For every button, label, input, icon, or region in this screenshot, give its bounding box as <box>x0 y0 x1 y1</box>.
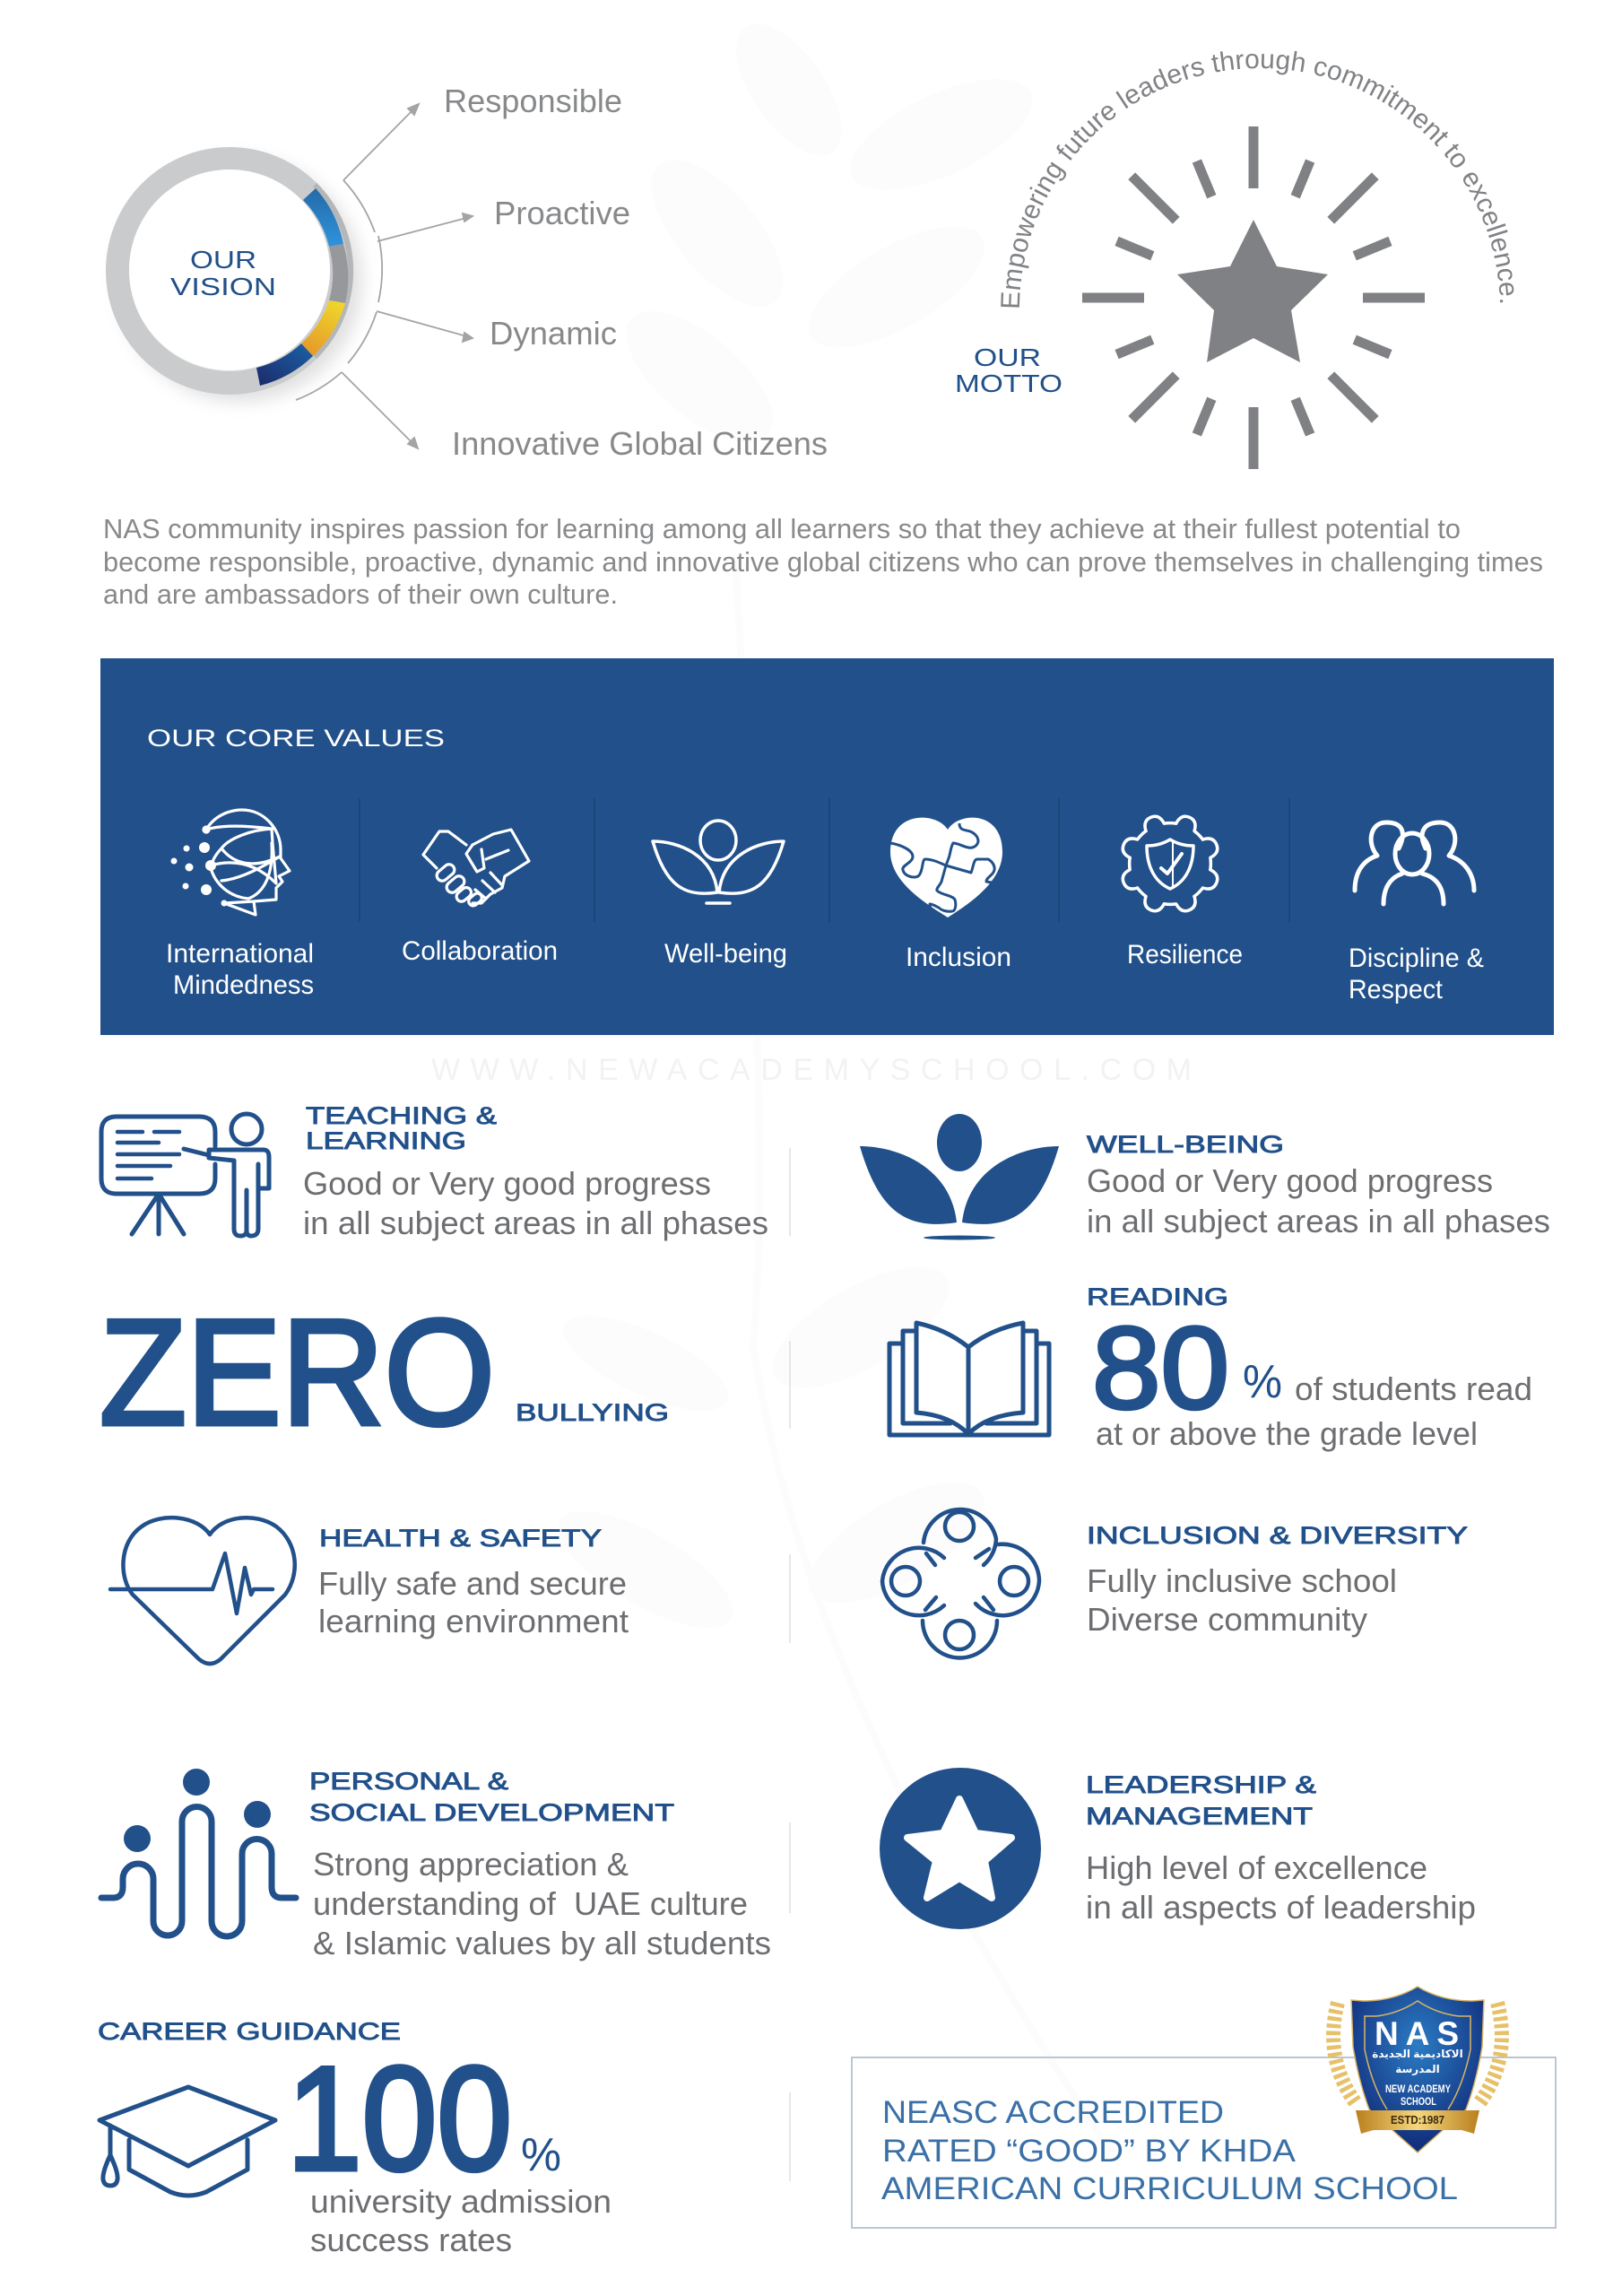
teaching text: in all subject areas in all phases <box>303 1205 768 1241</box>
teaching text <box>303 1165 768 1241</box>
accreditation text: NEASC ACCREDITED <box>882 2095 1224 2130</box>
well-being text: Good or Very good progress <box>1087 1162 1493 1199</box>
icon: three figures wave <box>101 1769 296 1936</box>
block: zero bullying <box>100 1288 669 1457</box>
health heading: HEALTH & SAFETY <box>319 1525 602 1552</box>
well-being text <box>1087 1162 1550 1239</box>
vision items: Proactive <box>494 195 630 231</box>
leadership heading: LEADERSHIP & <box>1086 1771 1316 1798</box>
leadership text <box>1086 1849 1476 1926</box>
leadership heading <box>1086 1771 1316 1830</box>
mission paragraph: and are ambassadors of their own culture. <box>103 578 618 610</box>
personal heading: PERSONAL & <box>309 1768 508 1795</box>
vision label: VISION <box>170 273 276 300</box>
motto label: MOTTO <box>955 370 1063 397</box>
core value labels <box>166 936 1484 1004</box>
mission paragraph: become responsible, proactive, dynamic and innovative global citizens who can prove themselves in challenging times <box>103 546 1543 578</box>
health text: Fully safe and secure <box>318 1565 627 1602</box>
accreditation text: RATED “GOOD” BY KHDA <box>882 2134 1297 2169</box>
inclusion text: Diverse community <box>1087 1601 1367 1638</box>
logo: NAS crest: SCHOOL <box>1401 2097 1436 2108</box>
vision diagram <box>117 83 828 462</box>
block: career guidance <box>98 2018 612 2258</box>
career text: success rates <box>310 2222 512 2258</box>
inclusion text: Fully inclusive school <box>1087 1562 1397 1599</box>
background watermark plant <box>542 6 1112 2152</box>
icon: teacher at board <box>101 1114 269 1236</box>
teaching heading: TEACHING & <box>306 1102 497 1129</box>
teaching heading: LEARNING <box>306 1127 466 1154</box>
core value labels: Discipline & <box>1349 944 1484 973</box>
vision items: Dynamic <box>490 315 617 352</box>
icon: star badge <box>880 1768 1041 1929</box>
icon: puzzle heart <box>890 818 1002 918</box>
icon: open book <box>889 1323 1049 1435</box>
well-being heading: WELL-BEING <box>1087 1131 1284 1158</box>
teaching text: Good or Very good progress <box>303 1165 711 1202</box>
leadership text: High level of excellence <box>1086 1849 1427 1886</box>
accreditation text: AMERICAN CURRICULUM SCHOOL <box>881 2171 1458 2206</box>
icon: solid lotus <box>860 1114 1059 1239</box>
leadership heading: MANAGEMENT <box>1086 1803 1313 1830</box>
reading percent: % <box>1243 1356 1282 1408</box>
icon: globe head <box>170 810 290 915</box>
vision label: OUR <box>190 246 256 274</box>
bullying label: BULLYING <box>516 1399 669 1426</box>
block: well-being <box>860 1114 1550 1239</box>
watermark url: WWW.NEWACADEMYSCHOOL.COM <box>431 1053 1192 1087</box>
leadership text: in all aspects of leadership <box>1086 1889 1476 1926</box>
inclusion heading: INCLUSION & DIVERSITY <box>1087 1522 1468 1549</box>
personal text: & Islamic values by all students <box>313 1925 771 1961</box>
core value labels: International <box>166 939 314 969</box>
motto label: OUR <box>974 344 1041 371</box>
icon: star with rays <box>1082 126 1425 469</box>
career heading: CAREER GUIDANCE <box>98 2018 401 2045</box>
block: personal and social development <box>101 1768 771 1961</box>
icon: four linked figures <box>882 1509 1039 1657</box>
motto label <box>955 344 1063 397</box>
career text <box>310 2183 612 2258</box>
logo: NAS crest <box>1333 1987 1502 2152</box>
health text <box>318 1565 629 1639</box>
reading figure: 80 <box>1092 1302 1229 1433</box>
reading text: at or above the grade level <box>1096 1415 1478 1452</box>
block: teaching and learning <box>101 1102 768 1241</box>
block: inclusion and diversity <box>882 1509 1468 1657</box>
health text: learning environment <box>318 1603 629 1639</box>
career figure: 100 <box>287 2036 512 2201</box>
reading text: of students read <box>1295 1370 1532 1407</box>
personal text: Strong appreciation & <box>313 1846 629 1883</box>
icon: heart with pulse <box>110 1518 295 1664</box>
icon: graduation cap <box>100 2087 275 2196</box>
accreditation text <box>881 2095 1458 2206</box>
logo: NAS crest: NEW ACADEMY <box>1385 2084 1451 2095</box>
teaching heading <box>306 1102 497 1154</box>
vision label <box>170 246 276 300</box>
vision connector arcs and arrows <box>296 104 473 448</box>
icon: gear with shield <box>1115 809 1225 918</box>
panel: core values <box>100 658 1554 1035</box>
logo: NAS crest: ESTD:1987 <box>1391 2113 1444 2126</box>
personal heading: SOCIAL DEVELOPMENT <box>309 1799 674 1826</box>
motto curved text: Empowering future leaders through commitment to excellence. <box>1001 50 1514 308</box>
personal heading <box>309 1768 674 1826</box>
career text: university admission <box>310 2183 612 2220</box>
mission paragraph <box>103 513 1543 610</box>
core value labels: Resilience <box>1127 940 1243 970</box>
inclusion text <box>1087 1562 1397 1638</box>
vision items <box>444 83 828 462</box>
logo: NAS crest: NAS <box>1375 2015 1459 2052</box>
core value labels: Well-being <box>664 939 787 969</box>
motto diagram <box>955 50 1514 469</box>
core value labels: Respect <box>1349 975 1444 1004</box>
zero number: ZERO <box>100 1288 495 1457</box>
vision ring <box>117 158 362 402</box>
icon: people group <box>1355 822 1474 904</box>
block: reading <box>889 1283 1532 1452</box>
core values heading: OUR CORE VALUES <box>147 725 445 752</box>
vision items: Innovative Global Citizens <box>452 425 828 462</box>
reading text <box>1096 1370 1532 1452</box>
block: health and safety <box>110 1518 629 1664</box>
block: leadership and management <box>880 1768 1476 1929</box>
personal text: understanding of UAE culture <box>313 1885 748 1922</box>
logo: NAS crest: المدرسة <box>1395 2063 1440 2075</box>
vision items: Responsible <box>444 83 622 119</box>
mission paragraph: NAS community inspires passion for learning among all learners so that they achieve at their fullest potential to <box>103 513 1461 544</box>
panel: accreditation box <box>852 1987 1556 2228</box>
icon: lotus outline <box>653 821 784 903</box>
icon: handshake <box>423 830 529 908</box>
well-being text: in all subject areas in all phases <box>1087 1203 1550 1239</box>
personal text <box>313 1846 771 1961</box>
career percent: % <box>521 2129 561 2181</box>
core value labels: Collaboration <box>402 936 558 966</box>
core value labels: Inclusion <box>906 943 1011 972</box>
core value labels: Mindedness <box>173 970 314 1000</box>
logo: NAS crest: الاكاديمية الجديدة <box>1372 2048 1463 2060</box>
reading heading: READING <box>1087 1283 1228 1310</box>
